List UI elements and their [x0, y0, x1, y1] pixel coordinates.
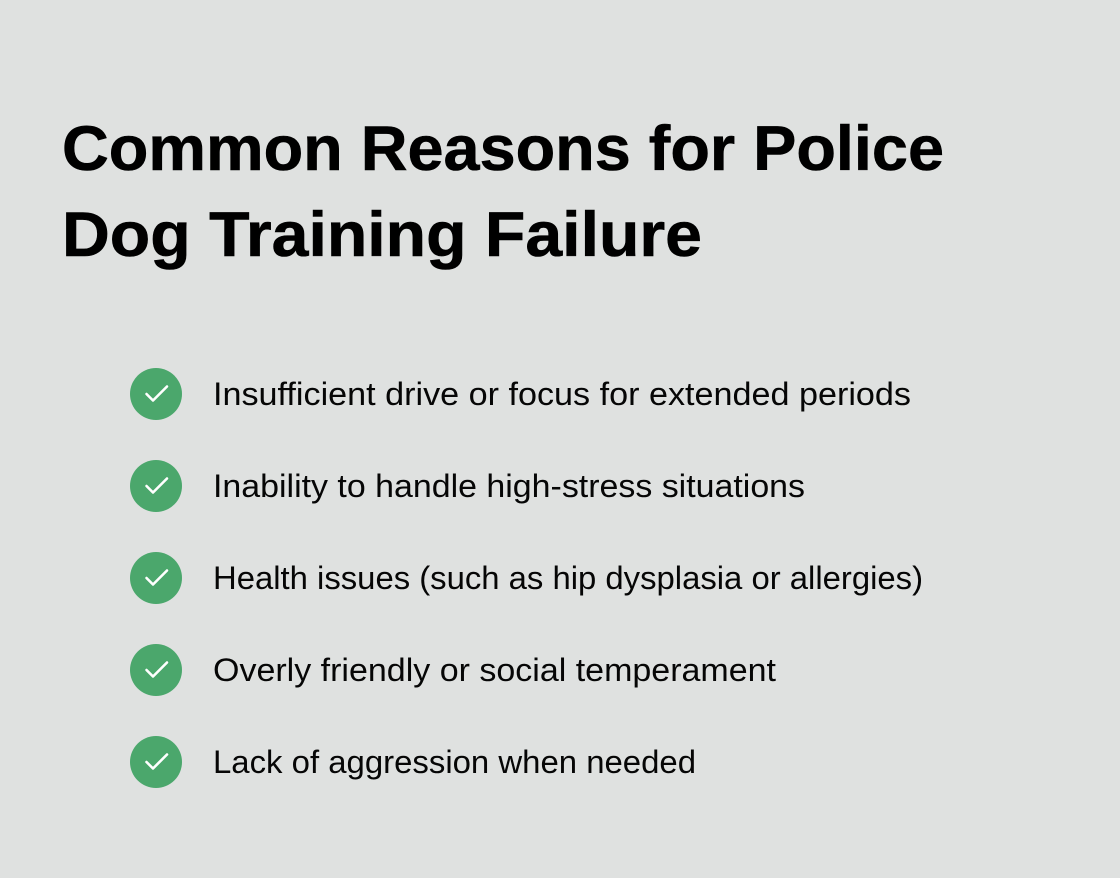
title: Common Reasons for Police	[62, 114, 944, 184]
item: high-stress situations: Inability to handle high-stress situations	[213, 468, 805, 504]
item: high-stress situations	[130, 460, 805, 512]
item: health issues	[130, 552, 923, 604]
item: social temperament	[130, 644, 776, 696]
title	[62, 114, 944, 270]
item: health issues: Health issues (such as hip dysplasia or allergies)	[213, 560, 923, 596]
item: insufficient drive	[130, 368, 911, 420]
checklist	[130, 368, 923, 788]
item: lack of aggression: Lack of aggression when needed	[213, 744, 696, 780]
item: lack of aggression	[130, 736, 696, 788]
title: Dog Training Failure	[62, 200, 702, 270]
item: insufficient drive: Insufficient drive or focus for extended periods	[213, 376, 911, 412]
item: social temperament: Overly friendly or social temperament	[213, 652, 776, 688]
